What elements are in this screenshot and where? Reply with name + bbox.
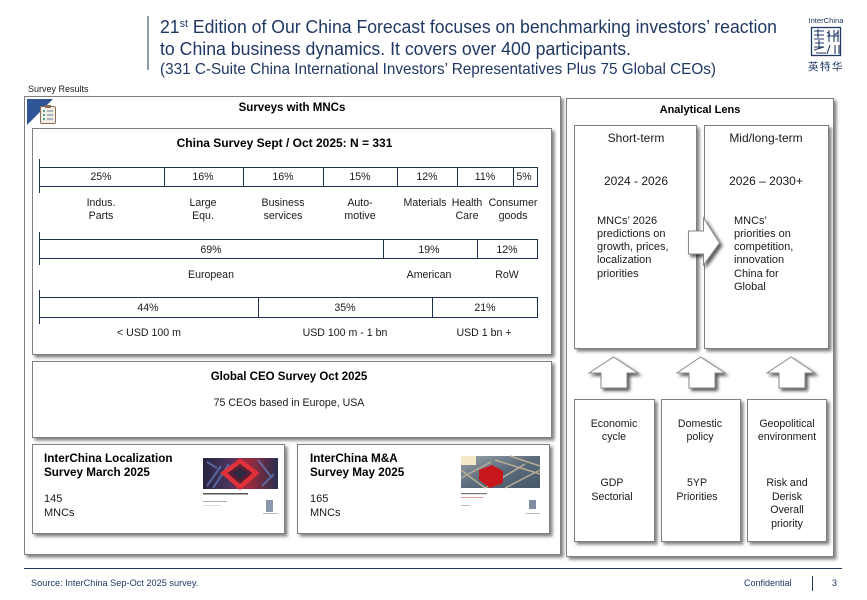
panel: Global CEO survey: 75 CEOs based in Europe, USA: [214, 397, 365, 409]
labels: industries: Indus.: [87, 197, 115, 209]
panel: domestic policy: policy: [686, 431, 714, 443]
icon: blue corner with clipboard: [27, 99, 56, 125]
panel: domestic policy: [662, 400, 740, 542]
panel: short-term: localization: [597, 254, 651, 266]
panel: Analytical Lens: [566, 98, 834, 556]
labels: origin: [188, 269, 519, 281]
panel: survey results: [24, 96, 560, 554]
title block: st: [180, 18, 188, 30]
labels: origin: RoW: [495, 269, 519, 281]
labels: industries: motive: [344, 210, 376, 222]
panel: mid/long-term: Global: [734, 281, 766, 293]
footer: Source: InterChina Sep-Oct 2025 survey.: [31, 578, 198, 588]
panel: mid/long-term: 2026 – 2030+: [729, 174, 803, 188]
panel: M&A survey: 165: [310, 493, 328, 505]
panel: geopolitical environment: Derisk: [772, 491, 803, 503]
panel: geopolitical environment: Overall: [770, 504, 804, 516]
heading: Surveys with MNCs: Surveys with MNCs: [239, 102, 345, 114]
labels: industries: Business: [262, 197, 304, 209]
footer: 3: [832, 578, 837, 588]
footer: [24, 568, 842, 591]
panel: short-term: predictions on: [597, 228, 666, 240]
arrow: short-term to mid/long-term: [688, 218, 720, 265]
labels: revenue: USD 1 bn +: [456, 327, 512, 339]
panel: geopolitical environment: Risk and: [766, 477, 808, 489]
title block: (331 C-Suite China International Investors’ Representatives Plus 75 Global CEOs): [160, 61, 716, 78]
labels: industries: Materials: [404, 197, 446, 209]
panel: economic cycle: Sectorial: [591, 491, 633, 503]
thumbnail: localization report cover: [203, 458, 278, 514]
panel: mid/long-term: competition,: [734, 241, 793, 253]
panel: Localization survey: Survey March 2025: [44, 466, 150, 479]
labels: revenue: USD 100 m - 1 bn: [303, 327, 387, 339]
panel: mid/long-term: MNCs’: [734, 215, 767, 227]
labels: industries: Large: [189, 197, 217, 209]
bar: origin split: 69%: [200, 244, 222, 256]
panel: M&A survey: MNCs: [310, 507, 341, 519]
thumbnail: M&A report cover: [461, 456, 540, 514]
labels: origin: European: [188, 269, 234, 281]
arrow: up from economic cycle: [589, 357, 638, 388]
panel: Localization survey: 145: [44, 493, 62, 505]
panel: M&A survey: InterChina M&A: [310, 452, 398, 465]
labels: industries: Care: [456, 210, 479, 222]
panel: mid/long-term: innovation: [734, 254, 784, 266]
bar: industry split: 12%: [416, 171, 438, 183]
panel: mid/long-term: priorities on: [734, 228, 791, 240]
panel: Global CEO survey: [32, 362, 552, 438]
labels: industries: Equ.: [192, 210, 214, 222]
panel: Global CEO survey: Global CEO Survey Oct 2025: [211, 371, 368, 383]
labels: industries: goods: [499, 210, 527, 222]
panel: mid/long-term: [704, 126, 828, 348]
arrow: up from geopolitical environment: [767, 357, 815, 388]
panel: economic cycle: Economic: [591, 418, 638, 430]
panel: economic cycle: cycle: [602, 431, 626, 443]
section label: Survey Results: Survey Results: [28, 84, 89, 94]
panel: domestic policy: 5YP: [687, 477, 707, 489]
panel: economic cycle: [574, 400, 654, 542]
panel: Localization survey: InterChina Localization: [44, 452, 173, 465]
bar: revenue split: 35%: [334, 302, 356, 314]
panel: domestic policy: Priorities: [676, 491, 718, 503]
labels: industries: Parts: [89, 210, 113, 222]
panel: M&A survey: Survey May 2025: [310, 466, 405, 479]
bar: origin split: 19%: [418, 244, 440, 256]
logo: InterChina: [808, 16, 844, 73]
title block: 21: [160, 17, 180, 37]
labels: revenue: < USD 100 m: [117, 327, 181, 339]
bar: origin split: [40, 232, 538, 265]
panel: geopolitical environment: [748, 400, 826, 542]
panel: mid/long-term: China for: [734, 268, 779, 280]
title block: Edition of Our China Forecast focuses on benchmarking investors’ reaction: [188, 17, 777, 37]
panel: short-term: MNCs’ 2026: [597, 215, 657, 227]
title block: to China business dynamics. It covers over 400 participants.: [160, 39, 631, 59]
panel: Localization survey: [32, 444, 284, 534]
bar: industry split: 5%: [516, 171, 532, 183]
bar: industry split: 16%: [272, 171, 294, 183]
labels: revenue: [117, 327, 512, 339]
bar: industry split: [40, 159, 538, 193]
panel: M&A survey: [298, 444, 550, 534]
panel: geopolitical environment: Geopolitical: [759, 418, 815, 430]
logo: InterChina: InterChina: [808, 16, 844, 25]
labels: industries: [87, 197, 538, 222]
footer: Confidential: [744, 578, 792, 588]
panel: domestic policy: Domestic: [678, 418, 723, 430]
panel: geopolitical environment: priority: [771, 518, 804, 530]
bar: industry split: 11%: [475, 171, 496, 183]
labels: industries: Auto-: [347, 197, 373, 209]
bar: origin split: 12%: [496, 244, 518, 256]
panel: geopolitical environment: environment: [758, 431, 816, 443]
bar: revenue split: 44%: [137, 302, 159, 314]
heading: Analytical Lens: Analytical Lens: [660, 104, 740, 116]
panel: economic cycle: GDP: [601, 477, 623, 489]
title block: [148, 16, 777, 78]
bar: industry split: 25%: [90, 171, 112, 183]
bar: revenue split: 21%: [474, 302, 496, 314]
bar: industry split: 16%: [192, 171, 214, 183]
heading: China survey: China Survey Sept / Oct 2025: N = 331: [177, 136, 393, 150]
bar: industry split: 15%: [349, 171, 371, 183]
labels: industries: services: [264, 210, 302, 222]
panel: short-term: growth, prices,: [597, 241, 669, 253]
labels: origin: American: [407, 269, 451, 281]
panel: China survey: [32, 128, 552, 354]
logo: InterChina: 英特华: [808, 60, 844, 73]
panel: short-term: priorities: [597, 268, 639, 280]
panel: mid/long-term: Mid/long-term: [729, 131, 803, 145]
panel: short-term: [574, 126, 696, 348]
arrow: up from domestic policy: [677, 357, 725, 388]
panel: short-term: 2024 - 2026: [604, 174, 668, 188]
panel: short-term: Short-term: [608, 131, 664, 145]
labels: industries: Consumer: [489, 197, 538, 209]
panel: Localization survey: MNCs: [44, 507, 75, 519]
labels: industries: Health: [452, 197, 482, 209]
bar: revenue split: [40, 290, 538, 324]
